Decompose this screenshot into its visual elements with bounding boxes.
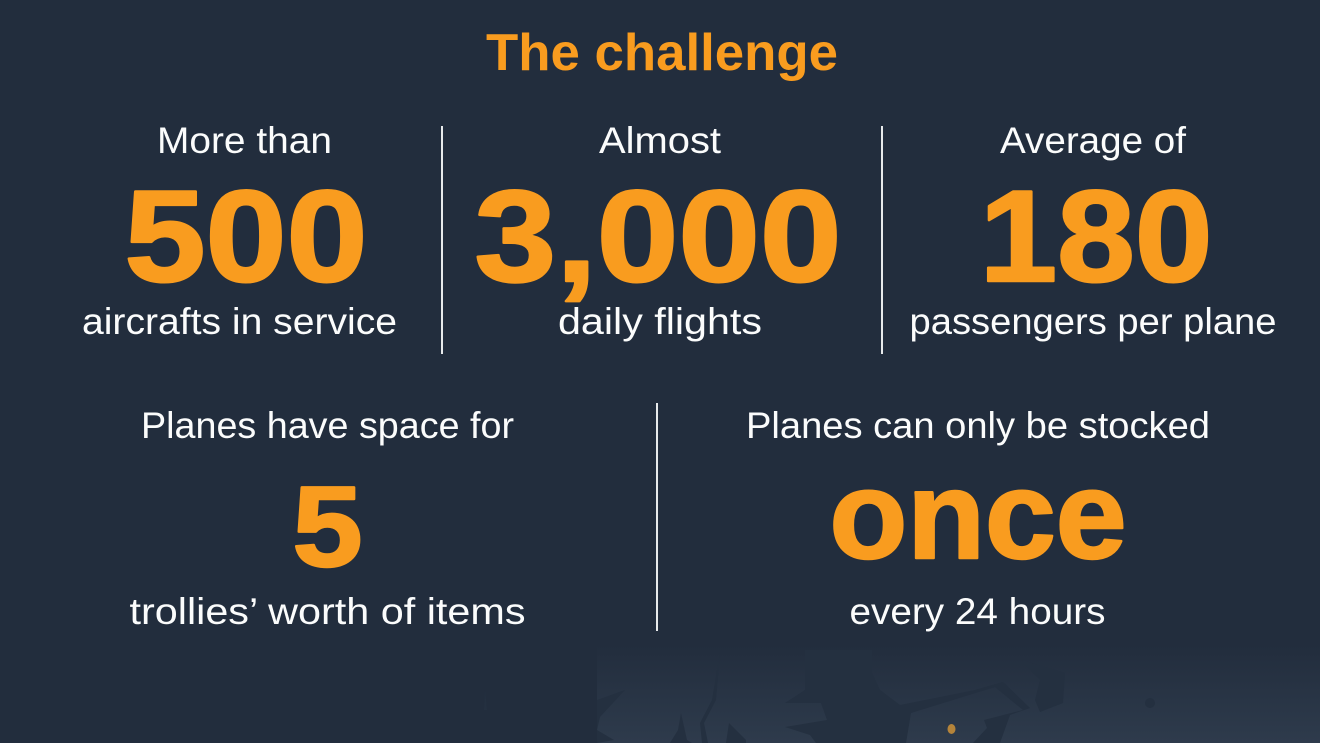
stat caption: trollies' worth of items: trollies’ worth of items: [130, 591, 526, 632]
title: The challenge: [486, 24, 838, 82]
icon: location dot: [948, 724, 956, 734]
stat number: 500: 500: [124, 163, 368, 309]
divider: [656, 403, 658, 631]
stat caption: passengers per plane: passengers per plane: [910, 301, 1276, 342]
stat: passengers: [910, 120, 1276, 342]
stat: aircraft: [82, 120, 397, 342]
stat: trolleys: [130, 405, 526, 632]
stat number: 180: 180: [980, 163, 1212, 309]
stat caption: aircrafts in service: aircrafts in service: [82, 301, 397, 342]
stat number: once: once: [830, 447, 1126, 585]
stat lead-in: Almost: Almost: [599, 120, 722, 161]
stat lead-in: More than: More than: [157, 120, 332, 161]
stat caption: daily flights: daily flights: [558, 301, 762, 342]
divider: [441, 126, 443, 354]
stat: flights: [474, 120, 842, 342]
stat lead-in: Planes have space for: Planes have space for: [141, 405, 514, 446]
divider: [881, 126, 883, 354]
stat caption: every 24 hours: every 24 hours: [850, 591, 1106, 632]
stat: stocking: [746, 405, 1210, 632]
background map: [484, 645, 1320, 743]
stat number: 5: 5: [292, 464, 362, 591]
stat number: 3,000: 3,000: [474, 163, 842, 309]
stat lead-in: Planes can only be stocked: Planes can only be stocked: [746, 405, 1210, 446]
stat lead-in: Average of: Average of: [1000, 120, 1187, 161]
